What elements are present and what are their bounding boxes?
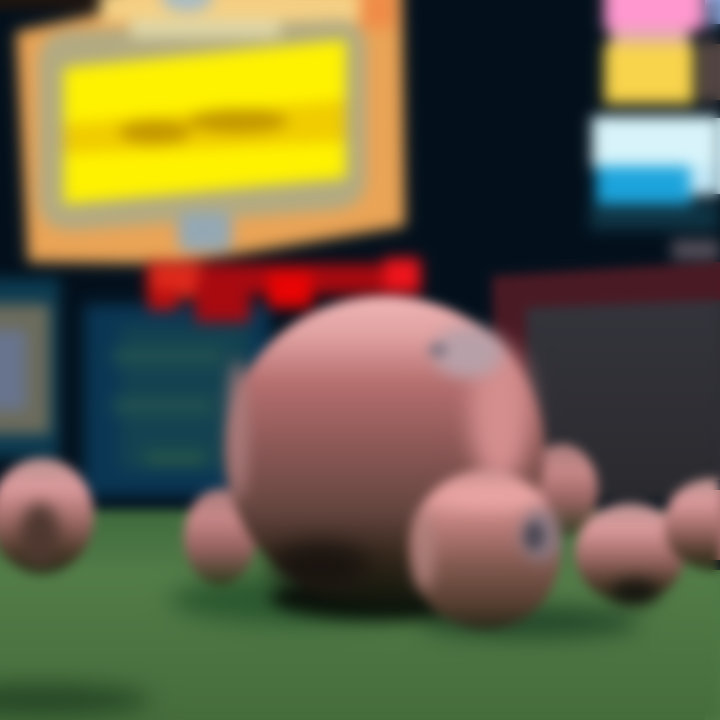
panel: blue poster	[84, 304, 270, 496]
sign text blur	[119, 120, 191, 144]
grass shadow right	[420, 606, 640, 638]
blue corner	[708, 0, 720, 26]
underlay brown	[705, 44, 720, 100]
body lower-left dark	[270, 543, 370, 587]
character: right arm	[526, 444, 598, 536]
panel: maroon screen	[492, 262, 720, 500]
character: left arm	[184, 489, 256, 585]
underlay far right blob	[705, 490, 720, 560]
sign top tab	[161, 0, 213, 12]
body right glow	[470, 345, 530, 485]
sign top highlight	[100, 0, 375, 22]
underlay grass right	[705, 570, 720, 720]
poster centre	[0, 330, 26, 410]
underlay blue corner	[705, 0, 720, 24]
blob shadow	[611, 579, 659, 605]
character: right foot front	[409, 470, 561, 630]
panel: colour board	[590, 0, 720, 260]
sign dark stripe	[64, 100, 346, 154]
panel: left poster	[0, 278, 60, 458]
underlay grass	[0, 700, 720, 720]
pink block	[604, 0, 704, 30]
character: left background blob	[0, 458, 94, 574]
yellow block	[604, 44, 694, 104]
sign yellow centre	[64, 40, 346, 204]
pink to yellow fade	[610, 30, 690, 44]
grey label	[672, 240, 720, 260]
brown block	[700, 40, 720, 102]
red banner	[146, 258, 421, 322]
poster text lines	[112, 350, 222, 362]
sign bottom tab	[178, 212, 232, 252]
underlay maroon	[705, 262, 720, 300]
grass	[0, 510, 720, 720]
blob shadow	[20, 503, 60, 567]
character: far right blob	[664, 478, 720, 571]
underlay pale	[705, 118, 720, 194]
panel: yellow sign	[16, 0, 405, 264]
foot left rim	[414, 510, 434, 590]
sign outer frame	[16, 0, 405, 264]
character: ground shadow	[270, 576, 500, 620]
underlay screen	[705, 300, 720, 480]
pale block	[592, 116, 720, 168]
poster frame	[0, 304, 50, 434]
body glare	[432, 326, 504, 378]
sign inner ring	[38, 20, 366, 230]
sign corner accent	[360, 0, 396, 28]
sign text blur	[188, 109, 288, 133]
blue block	[596, 166, 692, 204]
teal shadow	[590, 204, 720, 230]
character: small blob	[575, 503, 685, 605]
foot mark	[524, 522, 544, 550]
poster teal tint	[120, 325, 250, 470]
body mark	[428, 342, 448, 358]
screen inner	[526, 300, 720, 500]
foot highlight	[440, 484, 540, 508]
foot mark halo	[520, 509, 560, 561]
body left rim	[228, 360, 248, 500]
character: body	[225, 296, 545, 608]
top-left dark corner	[0, 0, 110, 10]
pale side	[690, 165, 720, 195]
grass dark corner	[0, 684, 150, 716]
grass shadow	[170, 576, 430, 624]
sign ring highlight	[130, 20, 280, 38]
